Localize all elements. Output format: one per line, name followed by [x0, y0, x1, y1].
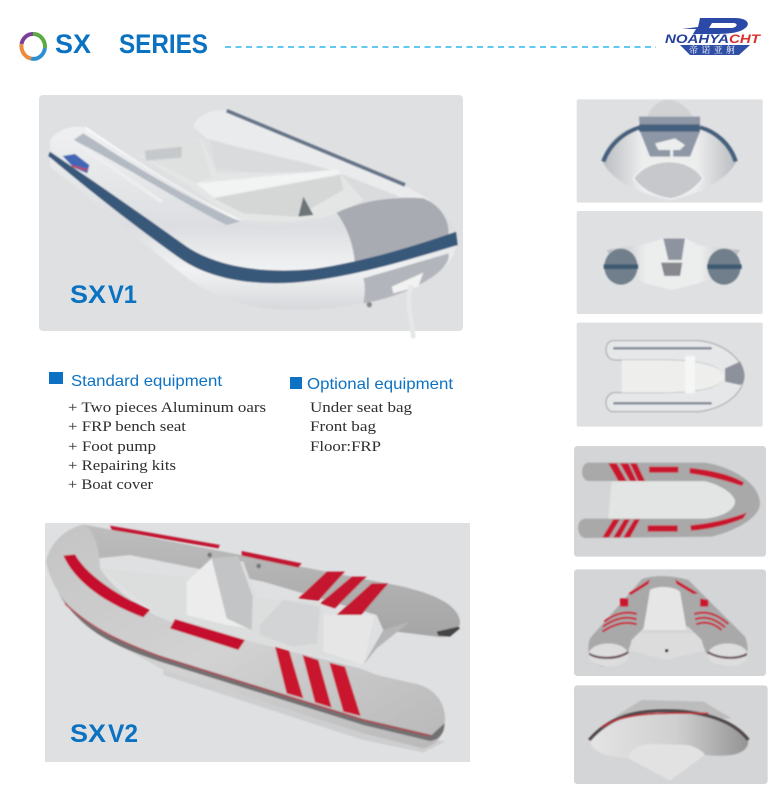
boat illustration: SX V1	[48, 110, 458, 338]
logo: Noah Yacht: CHT	[729, 32, 762, 46]
title: SX SERIES: SERIES	[119, 29, 208, 59]
block: standard equipment: + FRP bench seat	[68, 419, 187, 435]
block: standard equipment	[49, 372, 266, 493]
thumbnail: V2 front view	[574, 685, 768, 784]
block: optional equipment	[290, 376, 454, 455]
block: standard equipment: + Foot pump	[68, 439, 156, 455]
label: SX V1	[70, 281, 137, 309]
label: SX V2: V2	[108, 720, 138, 748]
thumbnail: V1 front view	[577, 99, 763, 203]
label: SX V2: SX	[70, 720, 106, 748]
title: SX SERIES: SX	[55, 29, 91, 59]
title: SX SERIES	[55, 29, 208, 59]
block: optional equipment: Optional equipment	[307, 376, 454, 393]
logo: Noah Yacht: NOAHYA	[665, 32, 729, 46]
logo: Noah Yacht: 帝诺亚舸	[689, 43, 735, 56]
label: SX V1: V1	[108, 281, 137, 309]
thumbnail: V2 top view	[574, 446, 766, 557]
block: standard equipment: + Boat cover	[68, 477, 153, 493]
block: standard equipment: + Repairing kits	[68, 458, 176, 474]
thumbnail: V1 rear view	[577, 211, 763, 314]
panel: SX V1 boat photo	[39, 95, 463, 338]
block: standard equipment: Standard equipment	[71, 373, 223, 390]
thumbnail: V2 rear view	[574, 569, 766, 676]
block: standard equipment: + Two pieces Aluminum oars	[68, 400, 266, 416]
header	[21, 18, 762, 59]
icon: colour ring	[21, 34, 45, 59]
label: SX V2	[70, 720, 138, 748]
logo: Noah Yacht	[665, 18, 762, 56]
panel: SX V2 boat photo	[45, 523, 470, 762]
block: optional equipment: Floor:FRP	[310, 439, 381, 455]
block: optional equipment: Under seat bag	[310, 400, 413, 416]
block: optional equipment: Front bag	[310, 419, 377, 435]
thumbnail: V1 top view	[577, 323, 763, 427]
label: SX V1: SX	[70, 281, 106, 309]
boat illustration: SX V2	[46, 524, 460, 752]
